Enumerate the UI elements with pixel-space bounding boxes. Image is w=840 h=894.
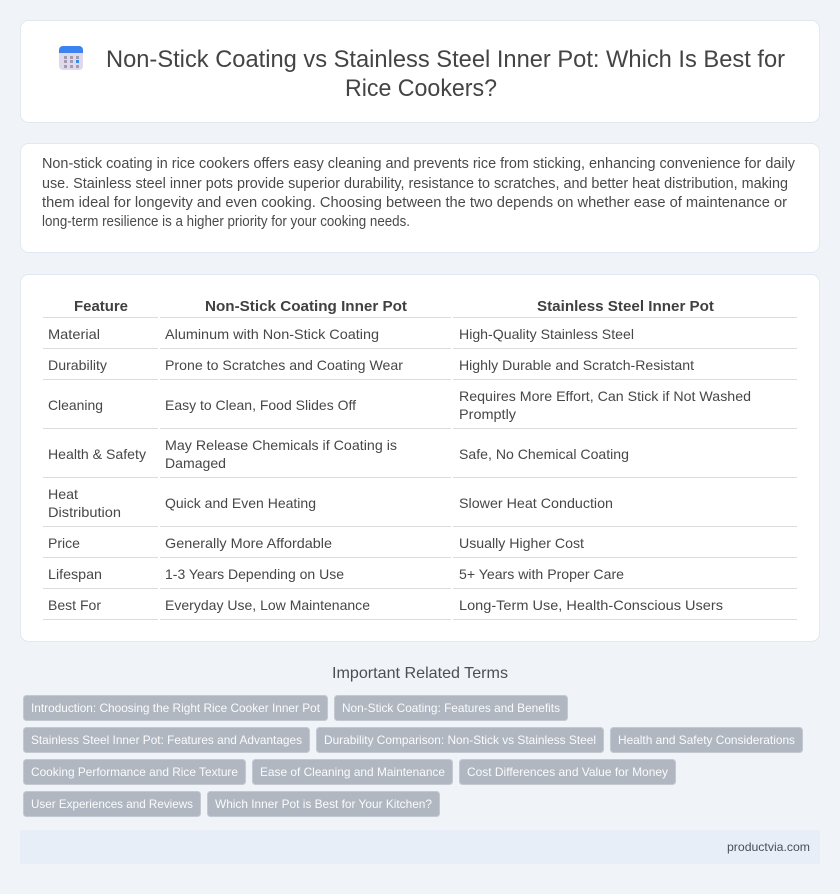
related term tags: Cost Differences and Value for Money [467,765,668,779]
row: material: High-Quality Stainless Steel [459,326,634,342]
icon: calendar [59,46,83,70]
row: durability: Highly Durable and Scratch-Resistant [459,357,694,373]
panel: title [20,20,820,122]
intro text: use. Stainless steel inner pots provide superior durability, resistance to scratches, and better heat distribution, making [42,176,788,192]
row: price [48,535,584,551]
related term tags: Durability Comparison: Non-Stick vs Stainless Steel [324,733,596,747]
title text: Rice Cookers? [345,75,497,102]
row: cleaning [48,388,751,422]
related term tags: Ease of Cleaning and Maintenance [260,765,445,779]
row: heat distribution: Distribution [48,504,121,520]
row: durability: Prone to Scratches and Coating Wear [165,357,403,373]
table header: Non-Stick Coating Inner Pot [205,299,407,315]
row: best for: Everyday Use, Low Maintenance [165,597,370,613]
row: heat distribution [48,486,613,520]
row: best for: Long-Term Use, Health-Conscious Users [459,597,723,613]
row: price: Price [48,535,80,551]
intro text: Non-stick coating in rice cookers offers easy cleaning and prevents rice from sticking, enhancing convenience for daily [42,156,796,172]
title text: Non-Stick Coating vs Stainless Steel Inner Pot: Which Is Best for [106,46,785,73]
related term tags: User Experiences and Reviews [31,797,193,811]
heading: important related terms: Important Related Terms [332,665,508,682]
row: cleaning: Promptly [459,406,516,422]
table header: Stainless Steel Inner Pot [537,299,714,315]
panel: comparison table [20,274,820,642]
row: health and safety [48,437,629,471]
intro text: long-term resilience is a higher priority for your cooking needs. [42,214,410,230]
row: lifespan: 1-3 Years Depending on Use [165,566,344,582]
related term tags: Which Inner Pot is Best for Your Kitchen? [215,797,432,811]
row: material: Material [48,326,100,342]
related term tags: Stainless Steel Inner Pot: Features and Advantages [31,733,302,747]
row: price: Usually Higher Cost [459,535,584,551]
table header [74,299,714,315]
related term tags [24,696,802,816]
row: lifespan: 5+ Years with Proper Care [459,566,624,582]
related term tags: Health and Safety Considerations [618,733,795,747]
related term tags: Introduction: Choosing the Right Rice Cooker Inner Pot [31,701,321,715]
panel: introduction [20,144,820,252]
row: cleaning: Easy to Clean, Food Slides Off [165,397,356,413]
row: lifespan: Lifespan [48,566,102,582]
intro text [42,156,796,230]
row: price: Generally More Affordable [165,535,332,551]
row: heat distribution: Quick and Even Heating [165,495,316,511]
table header: Feature [74,299,128,315]
row: durability [48,357,694,373]
row: heat distribution: Slower Heat Conduction [459,495,613,511]
row: lifespan [48,566,624,582]
row: heat distribution: Heat [48,486,78,502]
row: best for: Best For [48,597,101,613]
row: health and safety: May Release Chemicals if Coating is [165,437,397,453]
intro text: them ideal for longevity and even cooking. Choosing between the two depends on whether ease of maintenance or [42,195,787,211]
footer [20,830,820,864]
title text [106,46,785,102]
row: health and safety: Safe, No Chemical Coating [459,446,629,462]
related term tags: Non-Stick Coating: Features and Benefits [342,701,560,715]
row: health and safety: Health & Safety [48,446,146,462]
footer: productvia.com [727,840,810,854]
row: health and safety: Damaged [165,455,226,471]
row: material: Aluminum with Non-Stick Coating [165,326,379,342]
related term tags: Cooking Performance and Rice Texture [31,765,238,779]
row: cleaning: Cleaning [48,397,103,413]
row: cleaning: Requires More Effort, Can Stick if Not Washed [459,388,751,404]
row: durability: Durability [48,357,107,373]
row: material [48,326,634,342]
row: best for [48,597,723,613]
